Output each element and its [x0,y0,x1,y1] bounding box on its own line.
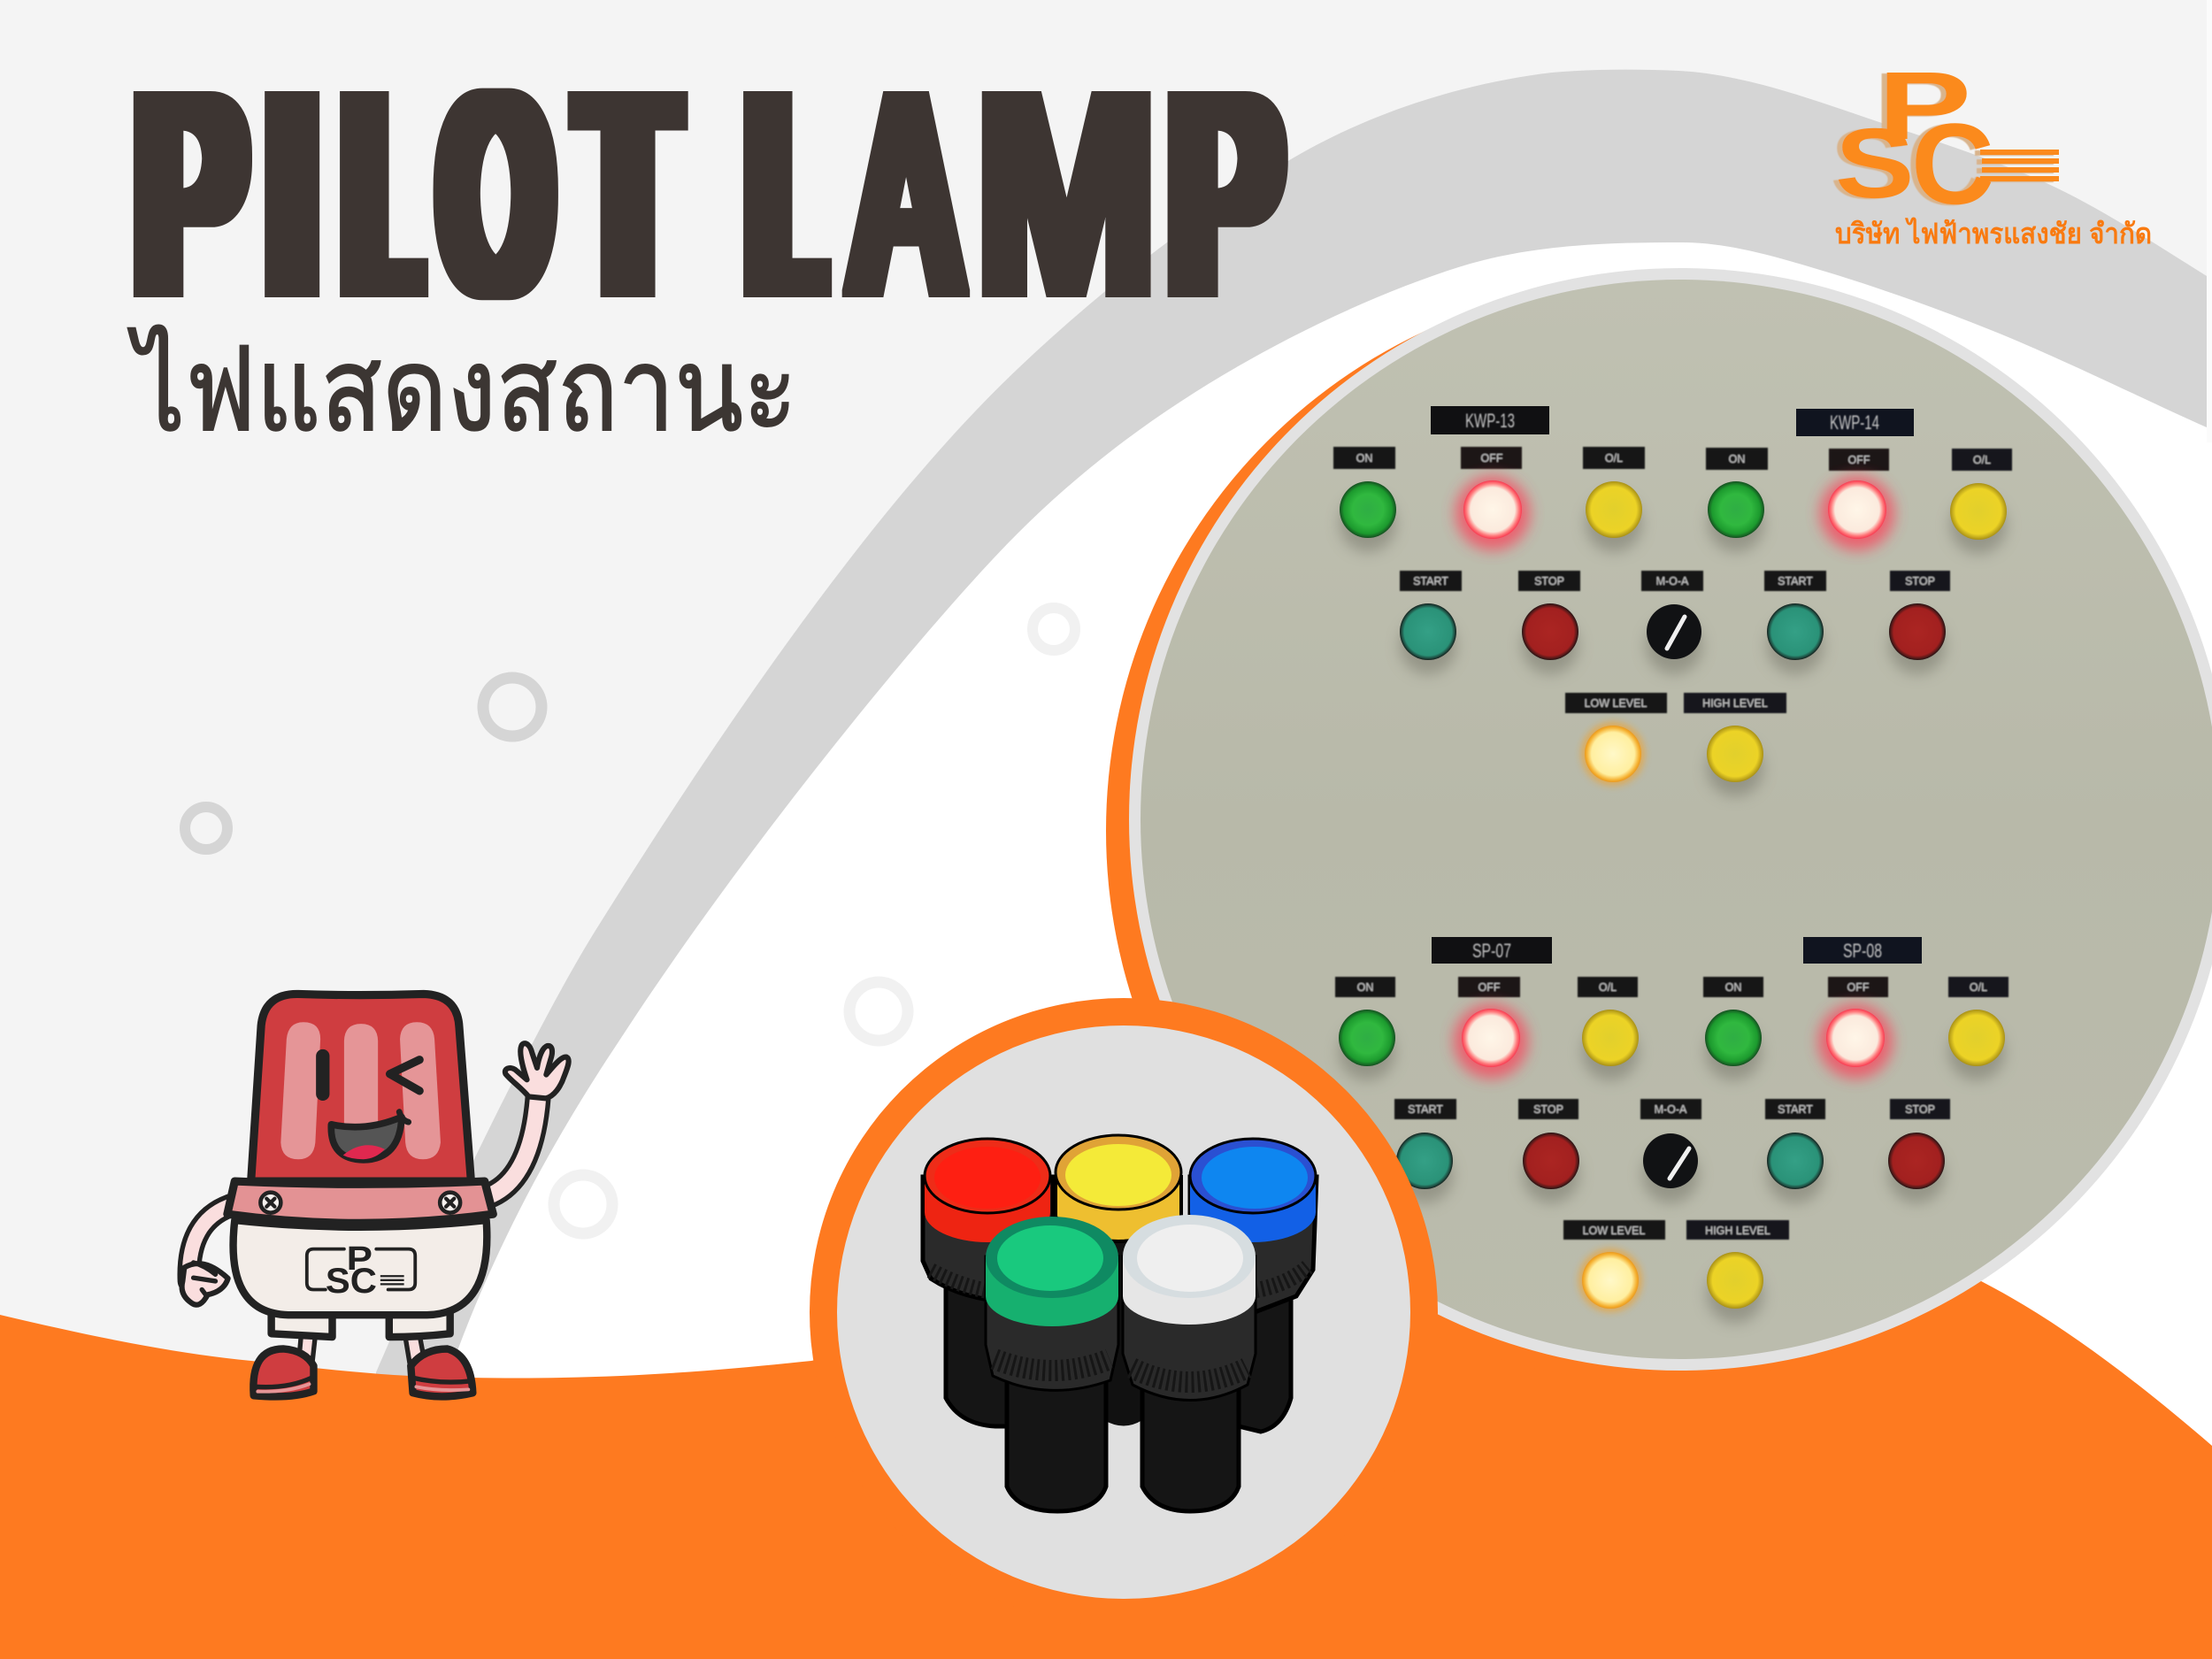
drop shadows under buttons [1339,495,2007,1323]
small labels: HIGH LEVEL [1705,1225,1770,1237]
logo letters: P [1878,52,1971,159]
logo letters: S [1835,109,1915,219]
teal start buttons [1396,603,1824,1189]
left hand [182,1263,228,1305]
title: P [1170,34,1280,356]
title: M [976,33,1156,356]
small labels: O/L [1599,981,1617,994]
orange crescent behind panel [1106,280,2208,1382]
shorts [272,1311,450,1337]
small labels: M-O-A [1656,575,1689,588]
title: L [753,34,818,356]
small labels: HIGH LEVEL [1702,697,1768,710]
right shoe [411,1348,472,1396]
small labels: O/L [1973,454,1991,466]
label: SP-08: SP-08 [1843,940,1882,962]
body logo [307,1240,415,1301]
body logo: SC [326,1261,377,1301]
right edge strip [2207,0,2212,442]
right hand [505,1043,569,1098]
title [136,32,1280,357]
red stop buttons [1522,603,1946,1189]
panel ring [1129,268,2212,1371]
label: SP-07: SP-07 [1472,940,1511,962]
logo letters [1835,52,2059,228]
small labels: OFF [1481,452,1503,465]
lamp: white [1123,1215,1256,1511]
lamp: red [923,1139,1053,1426]
body [234,1220,487,1315]
green indicator lamps [1339,481,1764,1066]
logo letters: C [1911,99,1994,228]
small labels: LOW LEVEL [1585,697,1647,710]
small labels: ON [1356,452,1372,465]
body logo: P [347,1240,373,1277]
gray swoosh [376,70,2207,1451]
small labels: STOP [1533,1103,1563,1116]
small labels: START [1778,1103,1813,1116]
small labels: ON [1729,453,1745,465]
dome [251,994,471,1181]
label: KWP-14 [1796,409,1914,436]
label: KWP-14: KWP-14 [1830,411,1879,434]
title: L [349,34,415,356]
small labels: STOP [1905,1103,1935,1116]
title: I [272,33,312,357]
orange wave [0,1234,2212,1659]
small labels: START [1413,575,1448,588]
lit amber lamps [1578,722,1645,1312]
lit red lamps [1454,476,1894,1079]
lamp: middle back body [1104,1239,1142,1426]
label: SP-08 [1803,937,1922,964]
label: KWP-13: KWP-13 [1465,410,1515,432]
yellow indicator lamps [1582,481,2007,1309]
left shoe [253,1348,313,1396]
title: A [847,33,965,356]
orange ring [810,998,1438,1626]
small labels: M-O-A [1655,1103,1687,1116]
title: P [136,33,244,356]
decorative rings [185,608,1075,1233]
gray disc [837,1025,1410,1599]
small labels: OFF [1478,981,1501,994]
label: SP-07 [1432,937,1552,964]
mouth [331,1112,409,1160]
lamp: yellow [1056,1135,1181,1241]
left arm [189,1205,233,1281]
dome highlights [280,1022,441,1159]
title: T [583,33,672,357]
product circle [810,998,1438,1626]
small labels: OFF [1847,454,1870,466]
wink [390,1060,419,1091]
small labels: LOW LEVEL [1583,1225,1645,1237]
white wave area [447,242,2212,1659]
small labels: STOP [1534,575,1564,588]
logo [1835,52,2152,250]
legs [298,1335,426,1366]
band [227,1181,493,1223]
small labels: ON [1357,981,1373,994]
small labels: START [1778,575,1813,588]
lamp: green [986,1217,1118,1511]
small labels [1333,447,2012,1240]
small labels: ON [1725,981,1741,994]
selector knobs [1643,604,1701,1188]
right arm [491,1096,538,1194]
label: KWP-13 [1431,406,1549,434]
title: O [441,32,551,356]
company name: บริษัท ไฟฟ้าพรแสงชัย จำกัด [1835,217,2152,250]
screws [260,1193,460,1213]
lamp: blue [1190,1139,1317,1432]
small labels: START [1408,1103,1443,1116]
small labels: O/L [1970,981,1987,994]
panel photo [1129,268,2212,1371]
eye [316,1049,329,1101]
mascot [182,994,569,1396]
small labels: OFF [1847,981,1870,994]
subtitle: ไฟแสดงสถานะ [127,325,797,455]
small labels: STOP [1905,575,1935,588]
small labels: O/L [1605,452,1623,465]
panel face [1141,280,2212,1359]
